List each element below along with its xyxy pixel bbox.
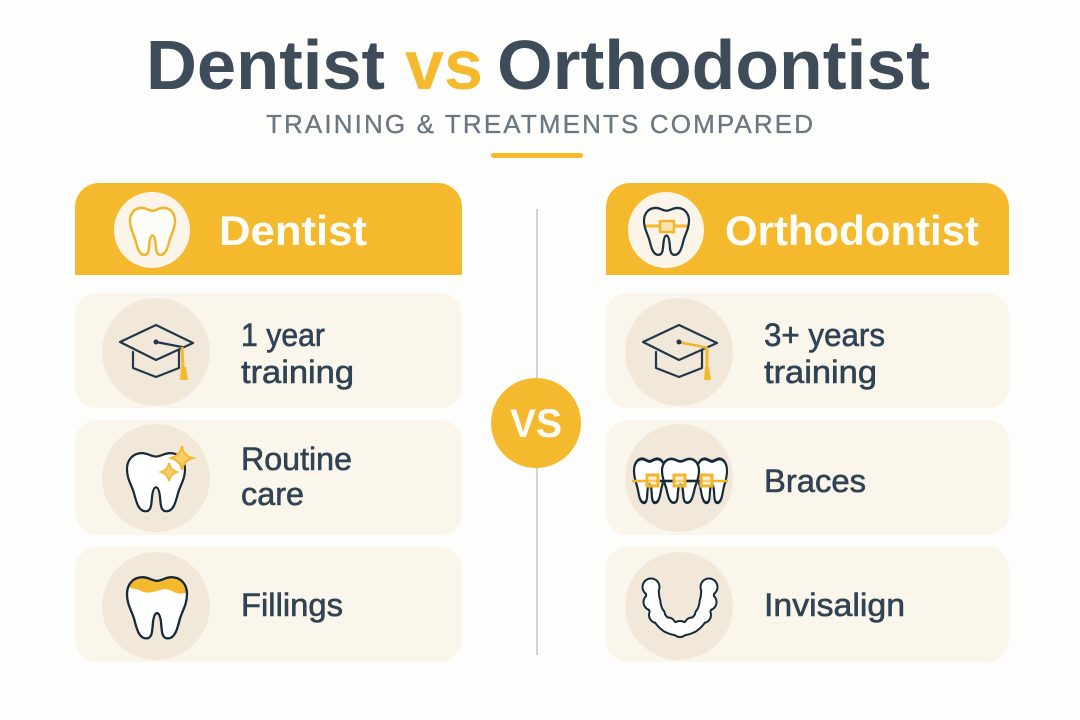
VS badge: VS xyxy=(510,402,562,446)
title xyxy=(146,26,930,104)
row: 3+ years training xyxy=(606,293,1009,408)
row: routine care xyxy=(75,420,462,535)
icon: braces on teeth xyxy=(632,459,728,503)
text: 1 year xyxy=(241,317,325,353)
icon: tooth with bracket xyxy=(628,192,704,268)
text: care xyxy=(241,476,304,512)
icon: graduation cap xyxy=(643,325,717,380)
row: invisalign xyxy=(606,547,1009,662)
icon: tooth with filling xyxy=(126,576,188,640)
text: Routine xyxy=(241,441,352,477)
subtitle: TRAINING & TREATMENTS COMPARED xyxy=(266,109,813,139)
row: fillings xyxy=(75,547,462,662)
VS badge xyxy=(491,378,581,468)
icon: plain tooth xyxy=(114,192,190,268)
icon: clear aligner xyxy=(642,578,718,638)
dentist heading: Dentist xyxy=(219,207,367,254)
text xyxy=(241,317,354,390)
text: training xyxy=(241,354,354,390)
title accent bar xyxy=(491,153,583,158)
title: Orthodontist xyxy=(497,26,930,104)
icon: graduation cap xyxy=(120,325,193,380)
panel: dentist xyxy=(75,183,462,662)
text: Braces xyxy=(764,463,866,499)
orthodontist heading: Orthodontist xyxy=(725,207,979,254)
center divider line xyxy=(536,209,538,655)
text xyxy=(241,441,352,512)
text: Invisalign xyxy=(764,587,905,623)
text: 3+ years xyxy=(764,317,885,353)
text xyxy=(764,317,885,390)
text: training xyxy=(764,354,877,390)
row: 1 year training xyxy=(75,293,462,408)
dentist header xyxy=(75,183,462,275)
title: vs xyxy=(405,26,483,104)
icon: sparkling tooth xyxy=(127,446,193,511)
text: Fillings xyxy=(241,587,343,623)
row: braces xyxy=(606,420,1009,535)
orthodontist header xyxy=(606,183,1009,275)
panel: orthodontist xyxy=(606,183,1009,662)
title: Dentist xyxy=(146,26,385,104)
